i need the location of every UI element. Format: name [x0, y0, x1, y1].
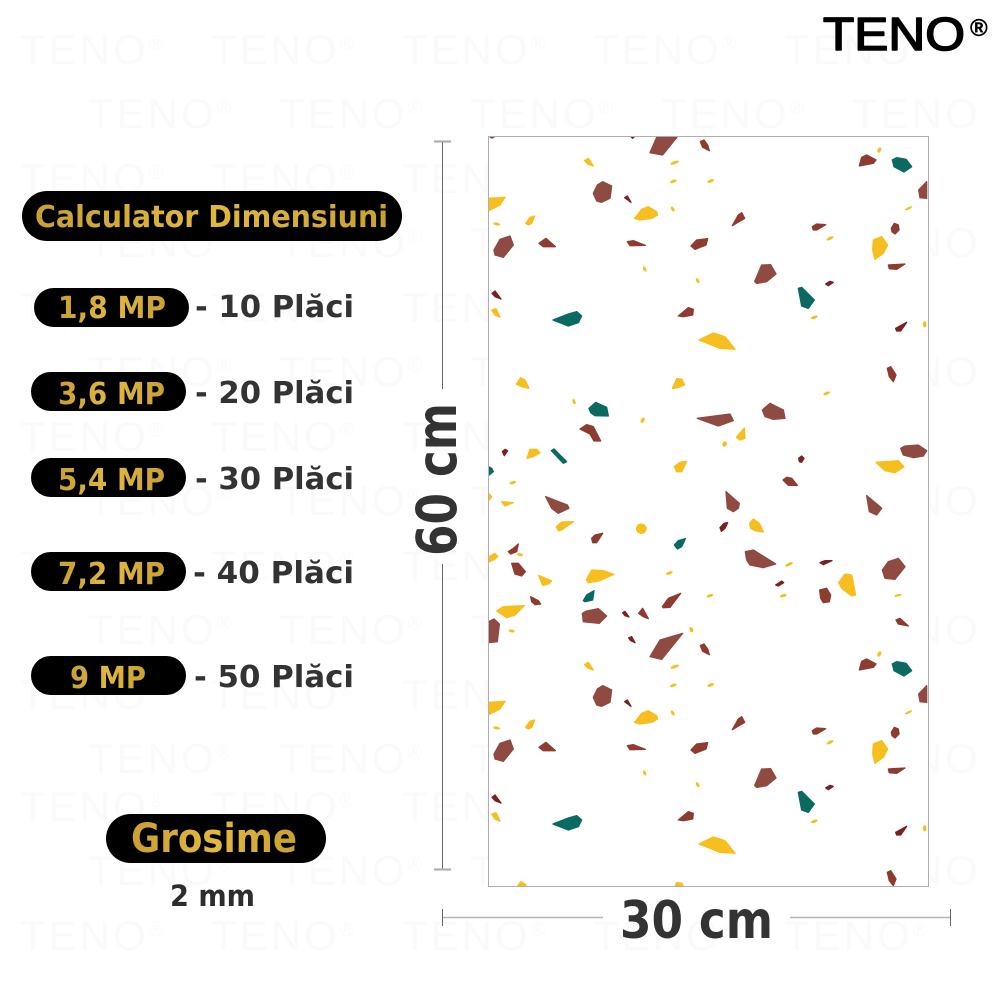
watermark pattern: TENO — [211, 26, 340, 73]
dimension: 60 cm height: 60 cm — [405, 403, 469, 556]
row: 7,2 MP - 40 Plăci: - 40 Plăci — [193, 556, 354, 591]
watermark pattern: TENO — [88, 90, 217, 137]
logo: TENO: ® — [970, 15, 988, 42]
dimension: 60 cm height — [405, 141, 469, 870]
text: 2 mm: 2 mm — [170, 879, 255, 913]
row: 3,6 MP - 20 Plăci: - 20 Plăci — [195, 376, 354, 411]
watermark pattern: TENO — [470, 90, 599, 137]
row: 3,6 MP - 20 Plăci — [31, 372, 354, 412]
heading: Grosime: Grosime — [131, 816, 297, 862]
watermark pattern: TENO — [279, 90, 408, 137]
row: 3,6 MP - 20 Plăci: 3,6 MP — [58, 377, 165, 412]
watermark pattern: ® — [217, 97, 232, 119]
row: 5,4 MP - 30 Plăci: - 30 Plăci — [195, 462, 354, 497]
watermark pattern: TENO — [20, 26, 149, 73]
heading: Calculator Dimensiuni — [22, 191, 402, 241]
row: 5,4 MP - 30 Plăci: 5,4 MP — [58, 463, 165, 498]
watermark pattern: ® — [408, 97, 423, 119]
watermark pattern: TENO — [402, 26, 531, 73]
dimension: 30 cm width — [442, 891, 950, 951]
row: 9 MP - 50 Plăci — [31, 656, 354, 696]
watermark pattern: TENO — [593, 26, 722, 73]
watermark pattern: ® — [149, 33, 164, 55]
dimension: 30 cm width: 30 cm — [620, 891, 773, 951]
row: 5,4 MP - 30 Plăci — [31, 458, 354, 498]
watermark pattern: ® — [599, 97, 614, 119]
row: 9 MP - 50 Plăci: - 50 Plăci — [194, 660, 354, 695]
row: 1,8 MP - 10 Plăci: - 10 Plăci — [195, 290, 354, 325]
row: 7,2 MP - 40 Plăci: 7,2 MP — [58, 557, 165, 592]
watermark pattern: ® — [790, 97, 805, 119]
row: 7,2 MP - 40 Plăci — [31, 552, 354, 592]
watermark pattern: ® — [913, 33, 928, 55]
row: 1,8 MP - 10 Plăci — [34, 288, 354, 327]
row: 9 MP - 50 Plăci: 9 MP — [70, 661, 146, 696]
row: 1,8 MP - 10 Plăci: 1,8 MP — [58, 291, 166, 326]
watermark pattern: ® — [340, 33, 355, 55]
watermark pattern: ® — [722, 33, 737, 55]
watermark pattern: ® — [531, 33, 546, 55]
logo: TENO: TENO — [823, 8, 965, 60]
heading: Calculator Dimensiuni: Calculator Dimensiuni — [35, 200, 388, 235]
panel: terrazzo tile — [488, 136, 928, 893]
watermark pattern: TENO — [661, 90, 790, 137]
watermark pattern: TENO — [784, 26, 913, 73]
watermark pattern: TENO — [852, 90, 981, 137]
